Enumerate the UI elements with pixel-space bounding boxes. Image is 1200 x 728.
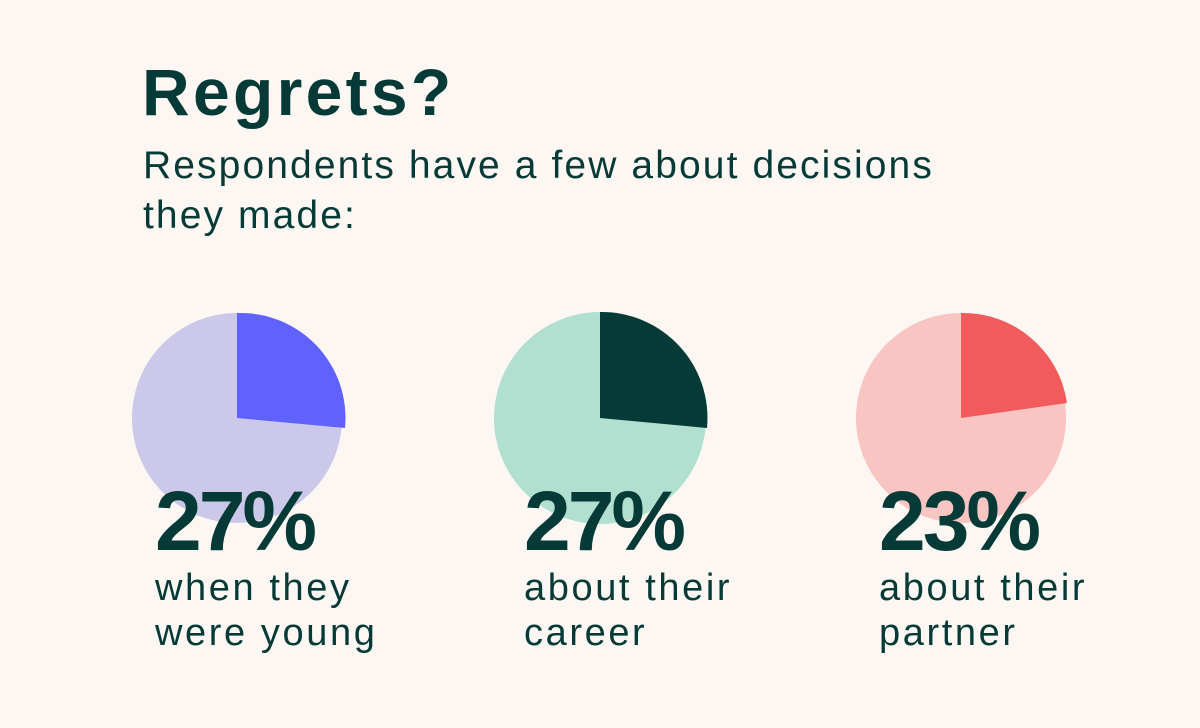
stat: young [155,474,377,654]
stat: young: were young [155,612,377,654]
pie: career [494,312,707,524]
stat: partner: partner [879,612,1018,654]
title: Regrets? [142,55,454,129]
stat: young: when they [155,567,352,609]
stat: young: 27% [155,474,314,568]
subtitle [143,144,934,237]
stat: career: career [524,612,647,654]
pie: partner [856,313,1067,523]
pie: young [132,313,345,523]
subtitle: they made: [143,194,357,237]
stat: partner: about their [879,567,1087,609]
stat: career [524,474,732,654]
stat: partner [879,474,1087,654]
stat: career: 27% [524,474,683,568]
stat: career: about their [524,567,732,609]
subtitle: Respondents have a few about decisions [143,144,934,187]
stat: partner: 23% [879,474,1038,568]
